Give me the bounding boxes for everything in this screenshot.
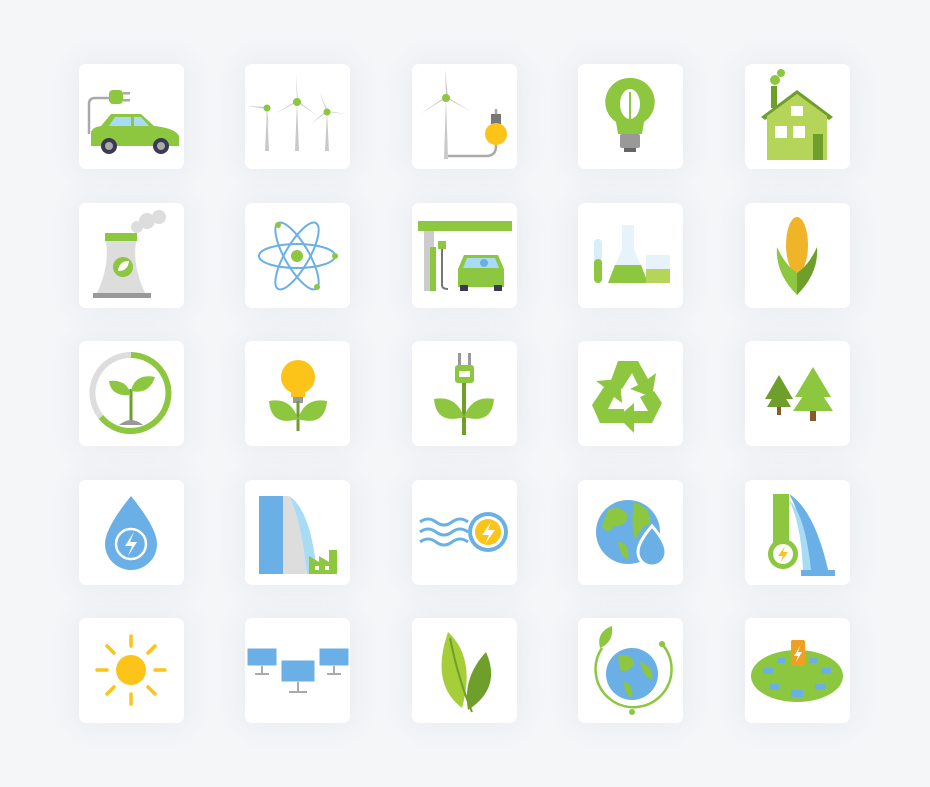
tile: wave gear — [412, 480, 517, 584]
tile: hydro gear — [745, 480, 850, 584]
tile: lab flasks — [578, 202, 683, 308]
tile: earth orbit — [578, 618, 683, 723]
tile: wind turbines — [245, 64, 350, 169]
tile: eco house — [745, 64, 850, 169]
tile: leaves — [412, 618, 517, 723]
tile: charging station — [412, 202, 517, 308]
tile: corn — [745, 202, 850, 308]
tile: sprout cycle — [79, 341, 184, 446]
tile: atom — [245, 202, 350, 308]
tile: sun — [79, 618, 184, 723]
tile: globe drop — [578, 480, 683, 584]
tile: plug plant — [412, 341, 517, 446]
tile: solar panels — [245, 618, 350, 723]
tile: water drop energy — [79, 480, 184, 584]
tile: dam factory — [245, 480, 350, 584]
tile: leaf bulb — [578, 64, 683, 169]
tile: electric car — [79, 64, 184, 169]
tile: bulb flower — [245, 341, 350, 446]
tile: turbine with bulb — [412, 64, 517, 169]
tile: trees — [745, 341, 850, 446]
tile: solar field — [745, 618, 850, 723]
tile: power plant — [79, 202, 184, 308]
tile: recycle — [578, 341, 683, 446]
